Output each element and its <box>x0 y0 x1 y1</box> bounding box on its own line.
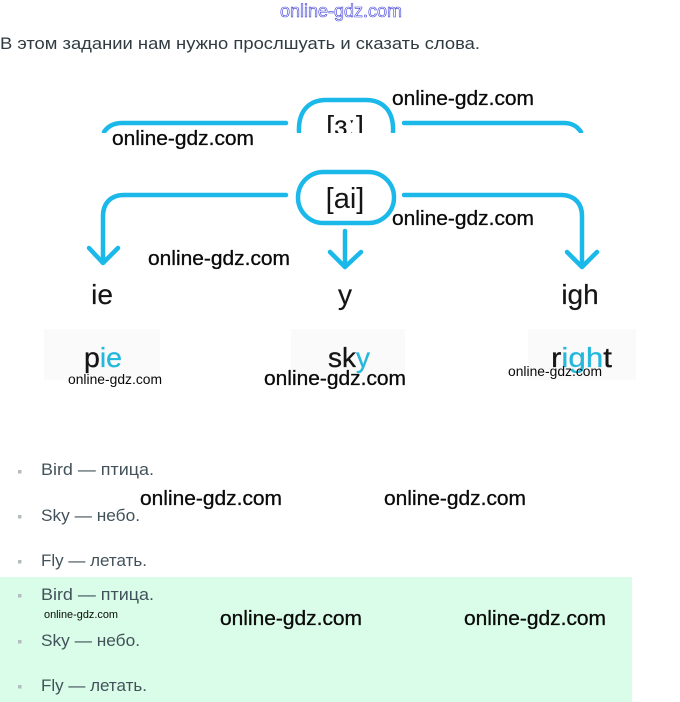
watermarks: repeated site name: online-gdz.com <box>392 208 534 230</box>
watermarks: repeated site name: online-gdz.com <box>508 363 602 379</box>
card: pie <box>44 329 160 380</box>
list: vocabulary: Fly — летать. <box>41 551 147 570</box>
card: right: right <box>551 342 612 373</box>
watermarks: repeated site name: online-gdz.com <box>384 488 526 510</box>
white mask below the clipped branch <box>95 133 595 145</box>
diagram: clipped [ɜː] branch <box>104 100 581 141</box>
list: vocabulary <box>18 460 154 570</box>
diagram: [ai] branch <box>89 172 597 267</box>
text: [ai]: [ai] <box>326 183 364 215</box>
list: vocabulary on green <box>18 585 154 695</box>
watermarks: repeated site name: online-gdz.com <box>140 488 282 510</box>
text: [ɜː]: [ɜː] <box>326 110 364 141</box>
arrow: center to y <box>330 231 361 267</box>
label: ie: ie <box>91 279 113 310</box>
card: sky: sky <box>328 342 370 373</box>
arrow: right to igh <box>404 195 597 267</box>
pill: [ai] <box>298 172 394 223</box>
watermarks: repeated site name: online-gdz.com <box>220 608 362 630</box>
line: left branch, clipped <box>104 123 286 132</box>
list: vocabulary: Bird — птица. <box>41 460 154 479</box>
arrow: left to ie <box>89 195 286 263</box>
heading: task instruction: В этом задании нам нужно прослшуать и сказать слова. <box>0 34 480 53</box>
watermarks: repeated site name: online-gdz.com <box>392 88 534 110</box>
watermarks: repeated site name <box>44 88 606 630</box>
line: right branch, clipped <box>404 123 581 132</box>
watermarks: repeated site name: online-gdz.com <box>68 371 162 387</box>
pill: [ɜː] clipped outline <box>299 100 393 132</box>
watermarks: repeated site name: online-gdz.com <box>44 609 118 621</box>
list: vocabulary on green: Sky — небо. <box>41 631 140 650</box>
watermarks: repeated site name: online-gdz.com <box>148 248 290 270</box>
list: vocabulary: Sky — небо. <box>41 506 140 525</box>
card: pie: pie <box>84 342 122 373</box>
watermarks: repeated site name: online-gdz.com <box>264 368 406 390</box>
label: y: y <box>338 279 352 310</box>
label: igh: igh <box>561 279 599 310</box>
card: right <box>528 329 636 380</box>
watermark: outlined top link: online-gdz.com <box>280 1 402 21</box>
panel: green highlighted answer background <box>0 577 632 702</box>
watermarks: repeated site name: online-gdz.com <box>464 608 606 630</box>
list: vocabulary on green: Fly — летать. <box>41 676 147 695</box>
watermarks: repeated site name: online-gdz.com <box>112 128 254 150</box>
list: vocabulary on green: Bird — птица. <box>41 585 154 604</box>
card: sky <box>291 329 405 380</box>
